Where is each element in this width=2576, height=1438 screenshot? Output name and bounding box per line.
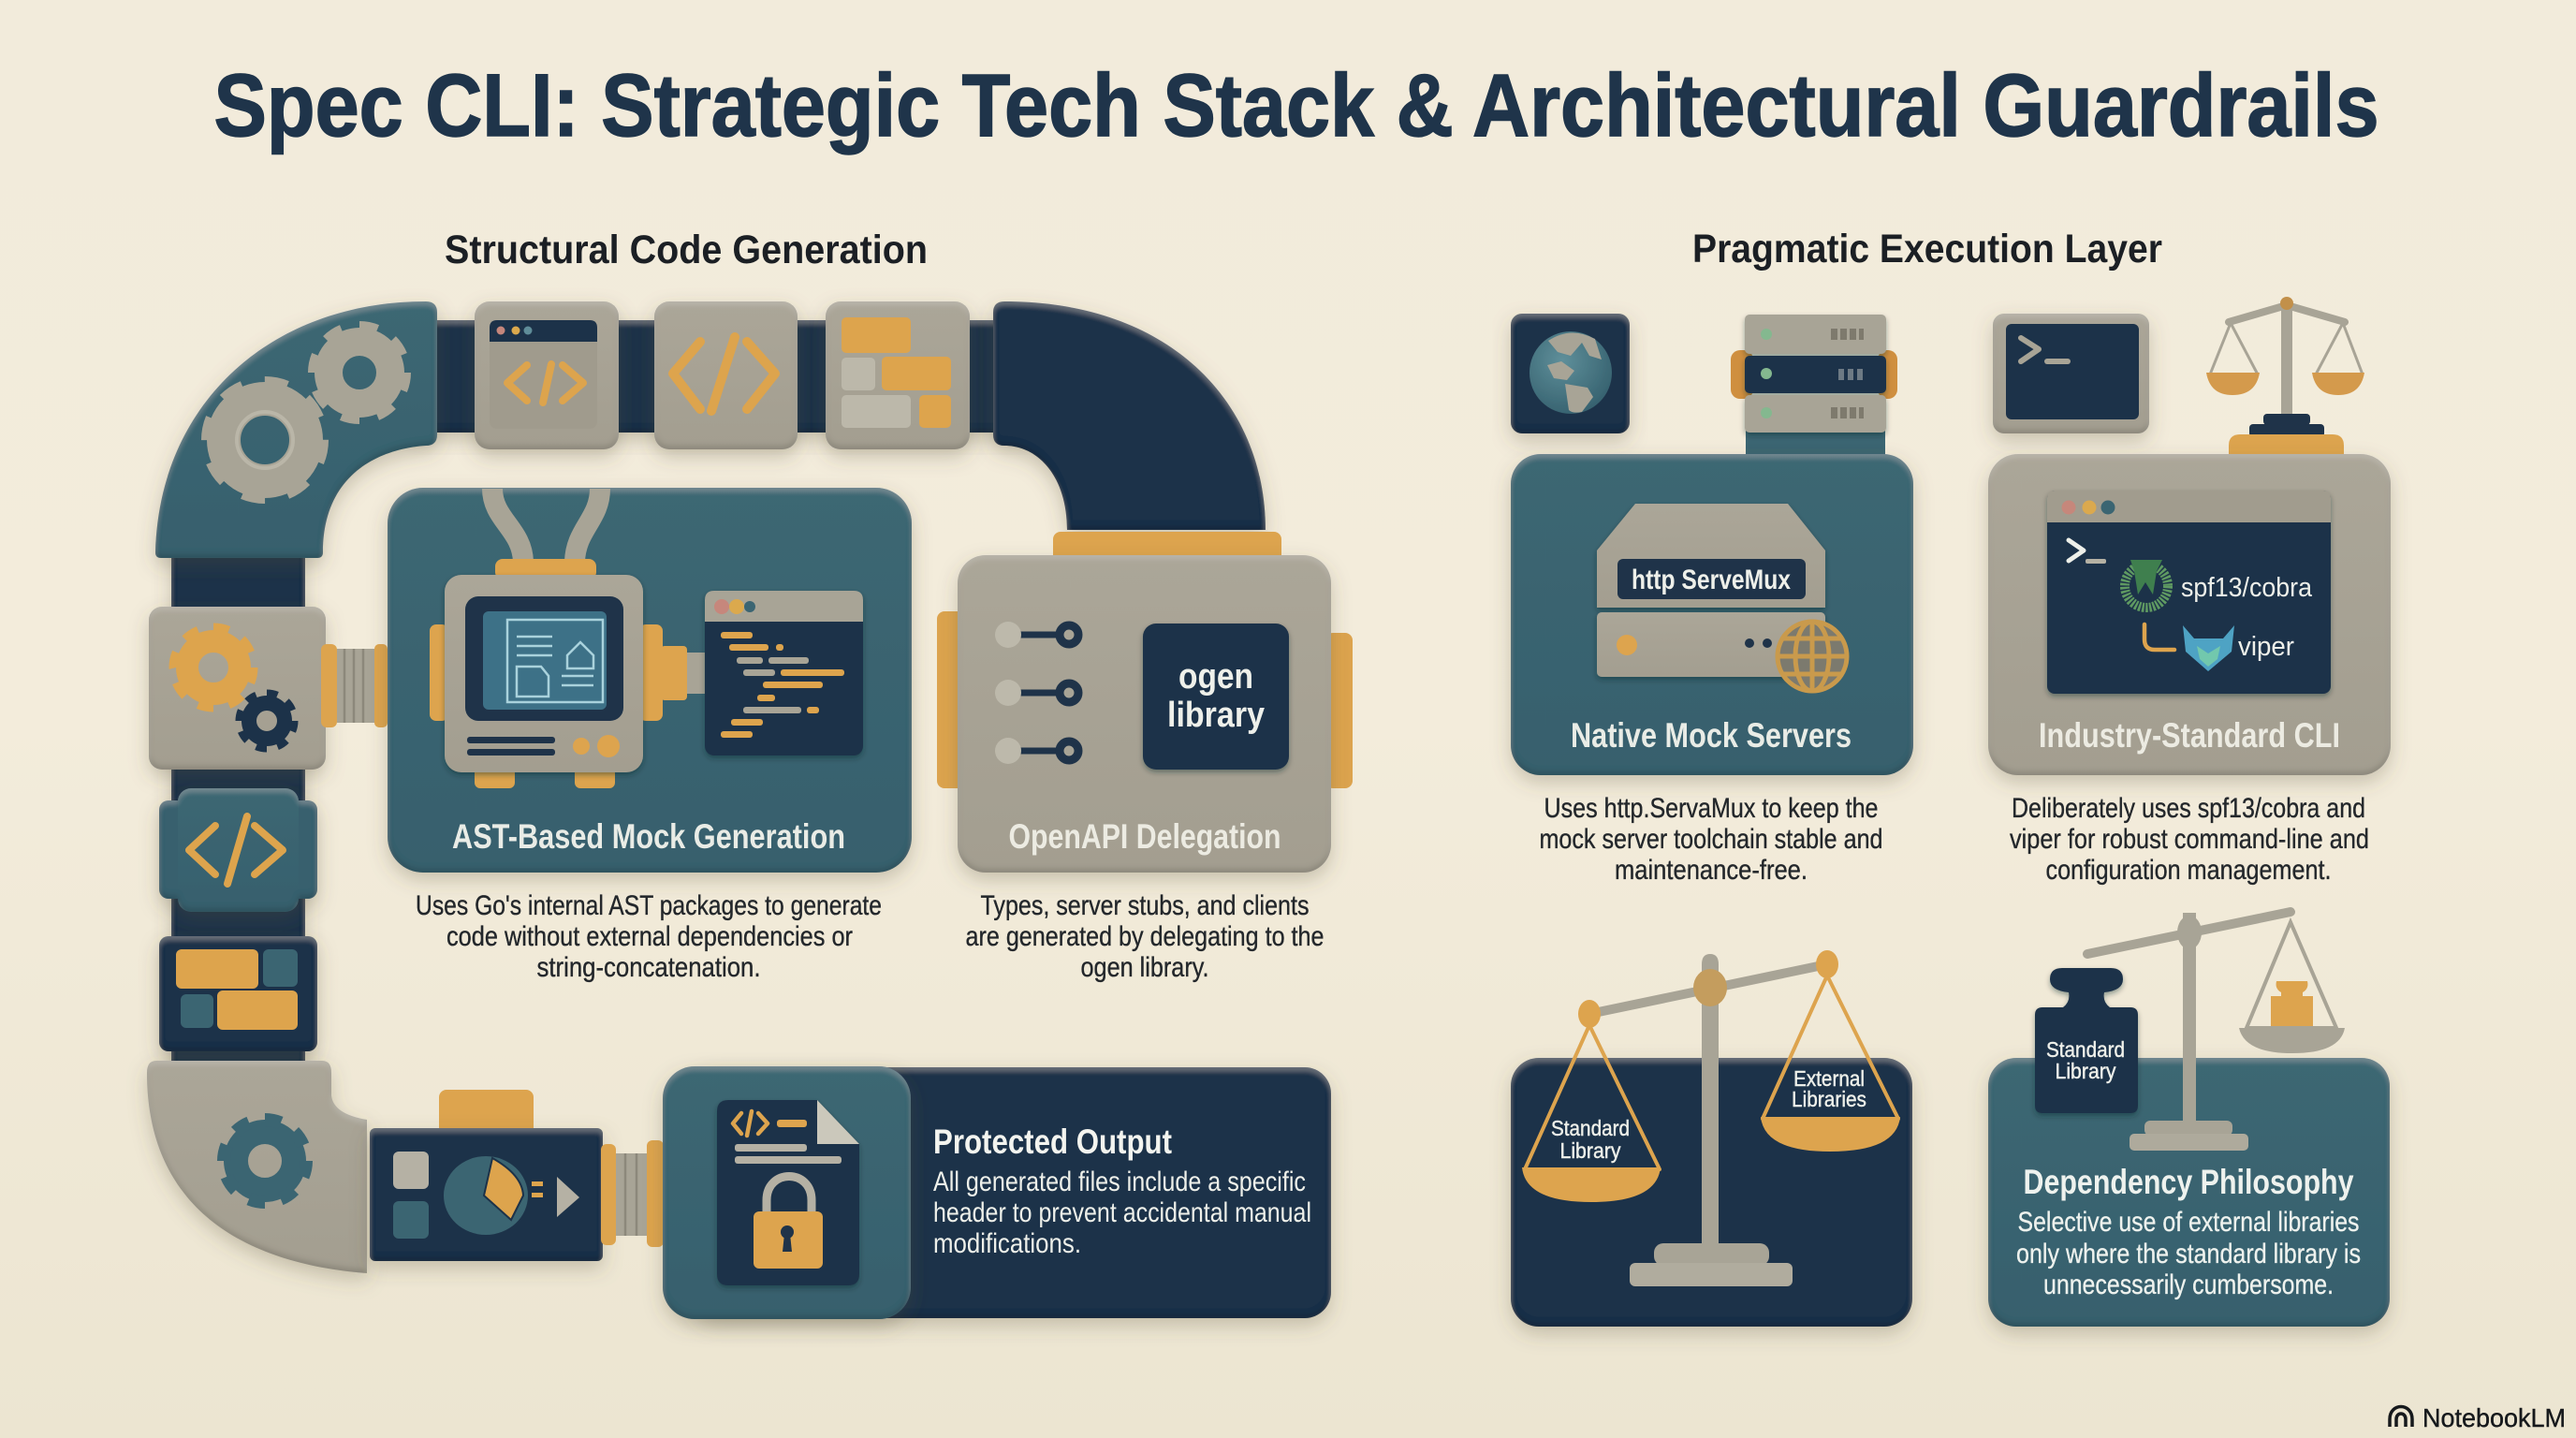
icon: terminal tile <box>1993 314 2149 433</box>
navy box: chart icons <box>370 1128 603 1261</box>
icon: server stack <box>1731 315 1897 463</box>
panel heading: OpenAPI Delegation <box>1009 817 1281 856</box>
text: Native Mock Servers description: Uses http.ServaMux to keep the <box>1544 793 1878 824</box>
text: AST description: code without external dependencies or <box>446 921 853 952</box>
icon: server with http ServeMux label <box>1597 504 1847 691</box>
text: Industry-Standard CLI description: viper for robust command-line and <box>2010 824 2369 855</box>
teal elbow with gears <box>155 301 437 558</box>
icon: right pan <box>1761 976 1900 1152</box>
text: Native Mock Servers description: mock server toolchain stable and <box>1539 824 1883 855</box>
heading: Structural Code Generation: Structural Code Generation <box>445 227 928 272</box>
icon: gold globe <box>1778 622 1847 691</box>
text: Industry-Standard CLI description: configuration management. <box>2046 855 2331 886</box>
panel: Industry-Standard CLI <box>1988 454 2391 775</box>
icon: locked document <box>717 1100 859 1285</box>
icon: large gear <box>211 386 319 494</box>
icon: right pan: External <box>1793 1066 1865 1091</box>
connector: coil to protected output <box>601 1140 664 1247</box>
icon: monitor machine <box>430 489 706 788</box>
icon: cobra logo <box>2125 560 2168 608</box>
icon: connector pins <box>995 622 1078 764</box>
text: Native Mock Servers description: maintenance-free. <box>1615 855 1808 886</box>
description: only where the standard library is <box>2016 1239 2361 1269</box>
heading: Protected Output <box>933 1123 1172 1161</box>
panel: Protected Output <box>663 1066 1331 1319</box>
panel: AST-Based Mock Generation <box>388 488 912 873</box>
description: header to prevent accidental manual <box>933 1197 1311 1228</box>
ogen library box: library <box>1167 696 1265 735</box>
icon: viper logo <box>2183 625 2234 671</box>
navy vertical pipe <box>171 543 305 1077</box>
icon: small scales <box>2206 297 2364 459</box>
panel heading: AST-Based Mock Generation <box>452 817 845 856</box>
teal neck <box>1746 426 1885 463</box>
title: Spec CLI: Strategic Tech Stack & Architectural Guardrails <box>213 56 2379 155</box>
gold side bars <box>937 611 1353 788</box>
text: Native Mock Servers description <box>1539 793 1883 886</box>
panel: Dependency Philosophy <box>1988 912 2390 1327</box>
heading: Pragmatic Execution Layer: Pragmatic Execution Layer <box>1692 227 2162 271</box>
text: AST description: Uses Go's internal AST packages to generate <box>416 890 882 921</box>
NotebookLM watermark: NotebookLM <box>2422 1403 2566 1432</box>
ogen library box: ogen <box>1178 657 1253 697</box>
tile: bricks icon <box>826 301 970 449</box>
tile: browser code icon <box>475 301 619 449</box>
description <box>2016 1207 2361 1300</box>
text: Industry-Standard CLI description <box>2010 793 2369 886</box>
tile: teal and gold bricks <box>159 936 317 1051</box>
icon: code window <box>705 591 863 756</box>
panel heading: Dependency Philosophy <box>2024 1163 2354 1201</box>
gold top tab <box>1053 532 1281 564</box>
text: OpenAPI description <box>966 890 1324 983</box>
icon: left pan <box>1522 1025 1661 1202</box>
panel heading: Industry-Standard CLI <box>2039 716 2340 755</box>
icon: navy weight labelled Standard Library: Library <box>2056 1059 2116 1083</box>
icon: scale <box>2087 912 2345 1151</box>
gold tab <box>439 1090 534 1137</box>
description: All generated files include a specific <box>933 1167 1306 1197</box>
pipeline: code generation conveyor <box>147 301 1266 1273</box>
panel heading: Native Mock Servers <box>1571 716 1852 755</box>
navy horizontal pipe <box>412 320 1030 433</box>
terminal window: viper <box>2238 632 2294 662</box>
description: Selective use of external libraries <box>2018 1207 2359 1238</box>
icon: left pan: Standard <box>1551 1116 1630 1140</box>
icon: left pan: Library <box>1559 1138 1621 1163</box>
icon: scale stand <box>1578 950 1838 1286</box>
panel: OpenAPI Delegation <box>937 532 1353 873</box>
icon: right pan: Libraries <box>1792 1087 1866 1111</box>
text: Industry-Standard CLI description: Deliberately uses spf13/cobra and <box>2012 793 2365 824</box>
grey elbow with teal gear <box>147 1061 367 1273</box>
navy elbow <box>993 301 1266 530</box>
text: OpenAPI description: ogen library. <box>1080 952 1209 983</box>
connector: coil to AST panel <box>321 644 388 727</box>
text: AST description <box>416 890 882 983</box>
icon: navy weight labelled Standard Library: Standard <box>2046 1037 2125 1062</box>
panel: Native Mock Servers <box>1511 454 1913 775</box>
tile: code icon <box>654 301 798 449</box>
description <box>933 1167 1311 1259</box>
panel: balance scale on navy <box>1511 950 1912 1327</box>
text: AST description: string-concatenation. <box>537 952 760 983</box>
ogen library box <box>1143 624 1289 770</box>
text: OpenAPI description: are generated by delegating to the <box>966 921 1324 952</box>
icon: server with http ServeMux label: http ServeMux <box>1632 565 1791 595</box>
tile: teal code icon <box>159 788 317 912</box>
icon: small gear <box>316 330 402 416</box>
terminal window <box>2047 491 2331 694</box>
tile: gold and navy gears <box>149 607 326 770</box>
icon: navy weight labelled Standard Library <box>2035 968 2138 1113</box>
text: OpenAPI description: Types, server stubs, and clients <box>981 890 1309 921</box>
description: unnecessarily cumbersome. <box>2043 1269 2334 1300</box>
icon: globe tile <box>1511 314 1630 433</box>
description: modifications. <box>933 1228 1081 1259</box>
connector <box>2144 624 2174 650</box>
terminal window: spf13/cobra <box>2181 573 2313 603</box>
